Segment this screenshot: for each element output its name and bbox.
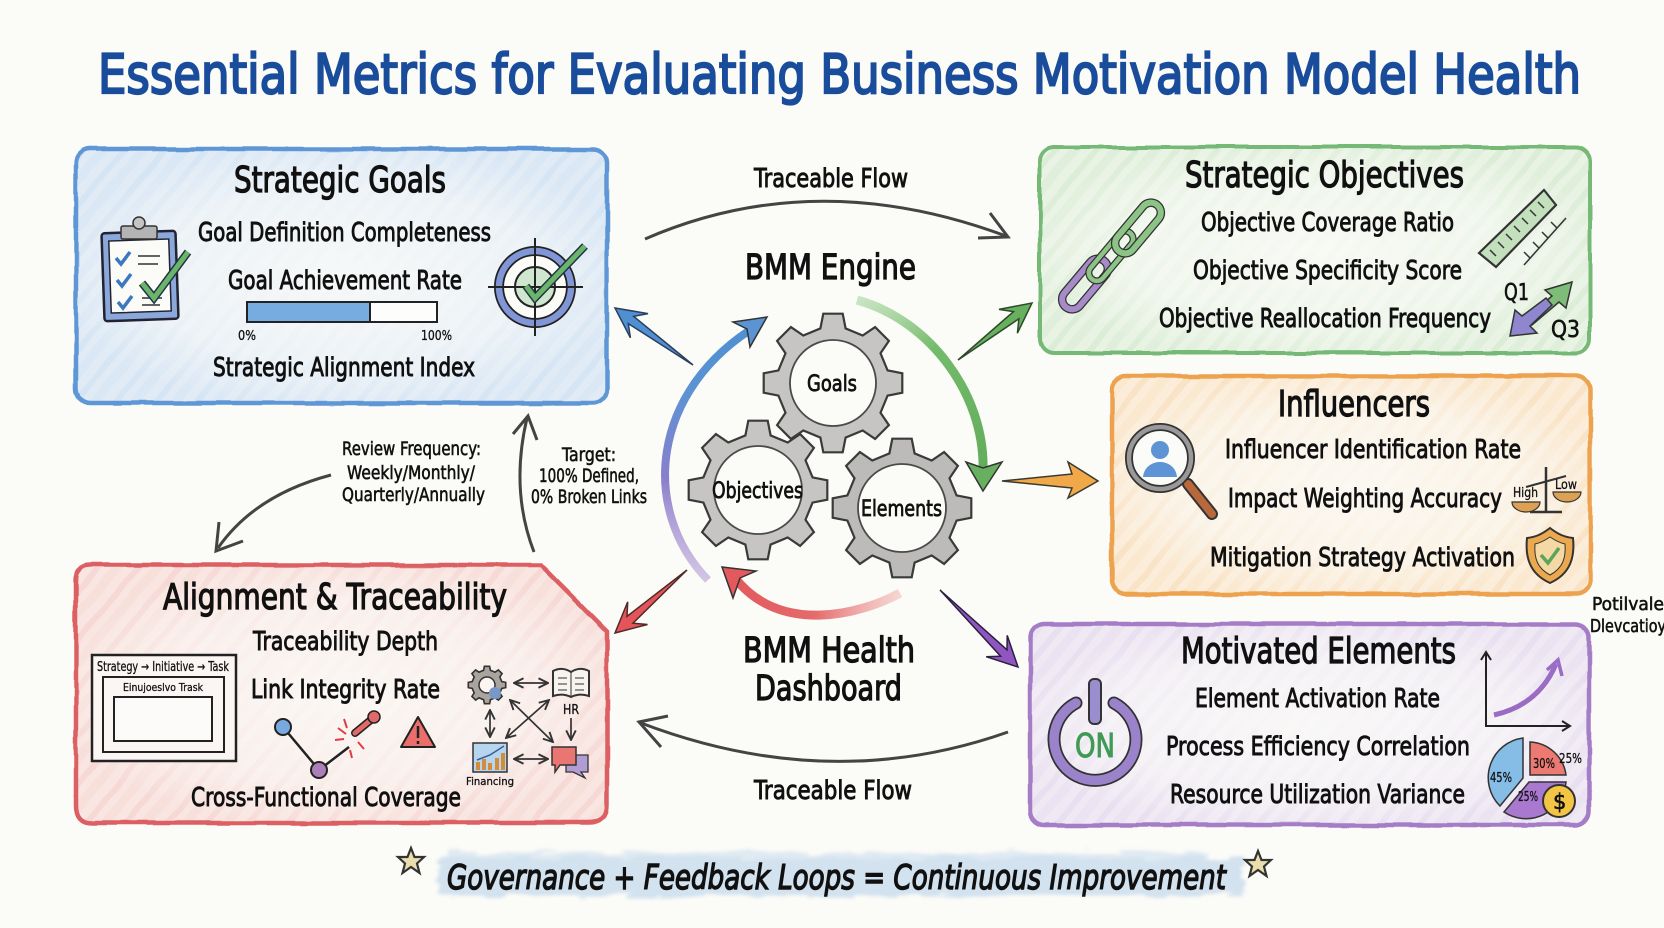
pie chart with dollar coin — [1488, 738, 1582, 819]
note: review frequency — [342, 438, 485, 506]
arrow: traceable flow bottom — [639, 716, 1008, 761]
metric: mitigation strategy activation: Mitigation Strategy Activation — [1210, 543, 1515, 573]
icon: target with check — [488, 238, 585, 336]
icon: chain — [1058, 199, 1165, 313]
arc arrow: green — [857, 300, 1002, 491]
icon: star right — [1245, 851, 1271, 876]
gear: objectives: Objectives — [712, 479, 803, 504]
connector arrows — [490, 683, 571, 759]
nested hierarchy box: Einujoeslvo Trask — [123, 681, 204, 694]
icon: finance chart — [473, 743, 507, 772]
arrow: to alignment and traceability — [615, 570, 687, 633]
progress bar: 100% — [421, 329, 452, 344]
metric: objective reallocation frequency: Objective Reallocation Frequency — [1159, 304, 1491, 334]
heading: strategic objectives: Strategic Objectives — [1185, 155, 1464, 196]
progress bar — [238, 302, 452, 344]
heading: BMM health dashboard: BMM Health — [743, 631, 915, 671]
icon: power on button — [1054, 679, 1136, 780]
side note text — [1590, 594, 1664, 637]
cross-functional network — [466, 666, 589, 788]
icon: quarterly reallocation arrows — [1504, 280, 1580, 343]
metric: resource utilization variance: Resource Utilization Variance — [1170, 780, 1465, 810]
arc arrow: red — [722, 567, 900, 615]
icon: ruler — [1479, 190, 1566, 267]
brush stroke — [438, 852, 1244, 896]
nested hierarchy box — [92, 655, 236, 761]
arrow: to motivated elements — [940, 590, 1018, 667]
heading: influencers: Influencers — [1278, 384, 1430, 425]
metric: process efficiency correlation: Process Efficiency Correlation — [1166, 732, 1470, 762]
icon: broken link — [275, 711, 380, 778]
footer text: Governance + Feedback Loops = Continuous Improvement — [447, 858, 1227, 898]
metric: impact weighting accuracy: Impact Weighting Accuracy — [1228, 484, 1502, 514]
note: review frequency: Quarterly/Annually — [342, 484, 485, 506]
icon: clipboard — [101, 217, 188, 321]
note: review frequency: Review Frequency: — [342, 438, 481, 460]
metric: influencer identification rate: Influencer Identification Rate — [1225, 435, 1521, 465]
footer banner — [398, 848, 1271, 898]
icon: chat bubbles — [552, 747, 588, 778]
icon: star left — [398, 848, 424, 873]
icon: power on button: ON — [1075, 726, 1115, 765]
icon: quarterly reallocation arrows: Q1 — [1504, 280, 1529, 306]
note: review frequency: Weekly/Monthly/ — [347, 462, 475, 484]
panel: alignment and traceability — [76, 565, 607, 823]
heading: BMM health dashboard — [743, 631, 915, 709]
gear: goals: Goals — [807, 372, 857, 397]
pie chart with dollar coin: 30% — [1533, 757, 1555, 772]
gear: objectives — [689, 421, 827, 559]
icon: shield with check — [1527, 528, 1573, 583]
icon: quarterly reallocation arrows: Q3 — [1551, 317, 1580, 343]
progress bar: 0% — [238, 329, 256, 344]
panel: motivated elements — [1030, 624, 1589, 825]
icon: warning triangle — [401, 717, 435, 747]
metric: cross-functional coverage: Cross-Functional Coverage — [191, 783, 461, 813]
metric: goal achievement rate: Goal Achievement Rate — [228, 266, 462, 296]
icon: magnifier with person — [1129, 427, 1212, 514]
arrow: target up — [513, 416, 537, 552]
heading: motivated elements: Motivated Elements — [1181, 631, 1456, 672]
metric: objective coverage ratio: Objective Coverage Ratio — [1201, 208, 1454, 238]
pie chart with dollar coin: 25% — [1518, 790, 1538, 805]
arrow: to strategic goals — [615, 308, 693, 365]
heading: strategic goals: Strategic Goals — [234, 160, 446, 201]
metric: goal definition completeness: Goal Definition Completeness — [198, 218, 491, 248]
nested hierarchy box: Strategy → Initiative → Task — [97, 660, 229, 675]
arrow: to influencers — [1002, 462, 1098, 498]
heading: BMM engine: BMM Engine — [745, 248, 916, 288]
icon: balance scale: Low — [1555, 478, 1577, 493]
arrow: review loop — [216, 475, 331, 551]
icon: book — [553, 669, 589, 697]
panel: strategic objectives — [1040, 147, 1590, 353]
icon: gear — [468, 666, 506, 704]
arc arrow: blue to purple — [665, 317, 767, 580]
panel: strategic goals — [76, 149, 607, 403]
label: Financing: Financing — [466, 775, 514, 788]
note: target — [531, 444, 647, 508]
metric: link integrity rate: Link Integrity Rate — [251, 675, 440, 705]
note: target: 100% Defined, — [539, 465, 639, 487]
heading: BMM health dashboard: Dashboard — [755, 669, 902, 709]
arrow: traceable flow top — [645, 201, 1008, 239]
gear: elements — [833, 439, 971, 577]
pie chart with dollar coin: $ — [1553, 790, 1566, 814]
label: traceable flow top: Traceable Flow — [753, 164, 908, 194]
pie chart with dollar coin: 25% — [1559, 752, 1582, 767]
icon: balance scale — [1512, 467, 1581, 512]
gear: elements: Elements — [861, 497, 942, 522]
line chart icon — [1481, 652, 1570, 731]
note: target: Target: — [561, 444, 616, 466]
note: target: 0% Broken Links — [531, 486, 647, 508]
metric: objective specificity score: Objective Specificity Score — [1193, 256, 1462, 286]
heading: alignment and traceability: Alignment & Traceability — [163, 577, 507, 618]
pie chart with dollar coin: 45% — [1490, 771, 1512, 786]
gear: goals — [764, 314, 902, 452]
label: traceable flow bottom: Traceable Flow — [753, 776, 912, 806]
metric: element activation rate: Element Activation Rate — [1195, 684, 1440, 714]
label: HR: HR — [563, 703, 579, 718]
metric: traceability depth: Traceability Depth — [252, 627, 438, 657]
icon: balance scale: High — [1513, 486, 1538, 501]
metric: strategic alignment index: Strategic Alignment Index — [213, 353, 475, 383]
arrow: to strategic objectives — [958, 303, 1032, 360]
panel: influencers — [1112, 376, 1590, 594]
